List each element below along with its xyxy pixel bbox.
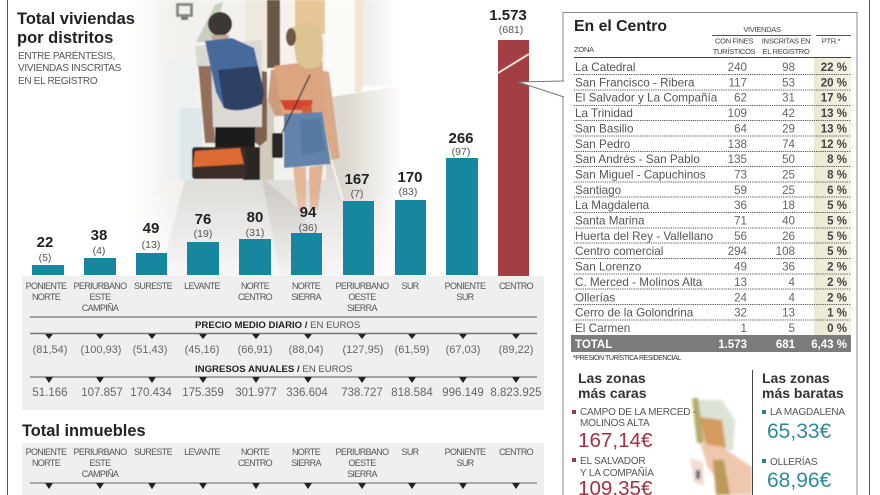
markers, second table <box>30 483 537 489</box>
table rows: San Francisco - Ribera <box>575 76 695 89</box>
district labels, second table: SIERRA <box>291 458 321 468</box>
table rows: 56 <box>734 230 747 243</box>
district labels: ESTE <box>90 292 111 302</box>
table rows: San Miguel - Capuchinos <box>575 168 706 182</box>
block: most expensive zones: Las zonas <box>578 370 646 386</box>
table rows: 13 % <box>821 123 847 135</box>
income row with markers: 107.857 <box>81 387 123 399</box>
income row with markers: 175.359 <box>182 387 224 399</box>
heading: Total inmuebles: Total inmuebles <box>22 422 146 440</box>
district labels: CAMPIÑA <box>82 303 119 313</box>
table rows: 294 <box>728 245 748 258</box>
price row with markers: (127,95) <box>343 344 383 356</box>
total row: 6,43 % <box>811 339 847 351</box>
table rows: 31 <box>782 92 795 105</box>
table rows: San Lorenzo <box>575 261 642 274</box>
bar chart: viviendas per district: (5) <box>39 252 51 264</box>
block: most expensive zones: 167,14€ <box>578 429 653 452</box>
table rows: 1 % <box>827 308 847 320</box>
table rows: Santiago <box>575 184 622 197</box>
row separators <box>574 74 851 320</box>
income row with markers: 8.823.925 <box>490 387 542 399</box>
table rows: 108 <box>776 245 795 258</box>
table rows: 98 <box>782 61 795 74</box>
price row with markers: (67,03) <box>446 344 480 356</box>
district labels, second table: PERIURBANO <box>335 447 389 457</box>
table rows: 4 <box>789 276 796 289</box>
block: most expensive zones: más caras <box>578 385 647 401</box>
block: most expensive zones: Y LA COMPAÑÍA <box>580 466 654 479</box>
price row with markers <box>30 334 537 356</box>
table rows: 2 % <box>827 277 847 289</box>
block: cheapest zones: 68,96€ <box>767 469 832 492</box>
district labels, second table: NORTE <box>32 458 61 468</box>
title: Total viviendas por distritos <box>17 10 135 47</box>
table rows: 25 <box>782 168 795 182</box>
bar chart: viviendas per district: 94 <box>300 204 317 221</box>
table header: ZONA <box>574 45 595 54</box>
table rows: 64 <box>734 122 748 135</box>
table rows: 109 <box>728 107 747 120</box>
district labels: LEVANTE <box>184 281 221 291</box>
table rows: El Salvador y La Compañía <box>575 92 718 105</box>
bar chart: viviendas per district: 170 <box>397 169 423 186</box>
district labels, second table: CENTRO <box>238 458 273 468</box>
price row with markers: (100,93) <box>81 344 121 356</box>
block: cheapest zones <box>762 370 845 492</box>
table rows: 49 <box>734 261 747 274</box>
table rows: 2 % <box>827 292 847 304</box>
heading: ingresos anuales: INGRESOS ANUALES / EN EUROS <box>195 364 352 375</box>
district labels, second table: ESTE <box>90 458 111 468</box>
table rows: 1 <box>741 322 747 335</box>
bar chart: viviendas per district: 80 <box>247 209 263 226</box>
table rows: 4 <box>789 291 796 304</box>
block: cheapest zones: más baratas <box>762 385 844 401</box>
district labels, second table: CAMPIÑA <box>82 469 119 479</box>
district labels: CENTRO <box>499 281 534 291</box>
district labels, second table: SUR <box>456 458 475 468</box>
district labels, second table <box>26 447 534 479</box>
income row with markers: 51.166 <box>32 387 68 399</box>
table rows: 25 <box>782 184 795 197</box>
table rows: 8 % <box>827 154 847 166</box>
PTR column shading <box>814 58 851 335</box>
income row with markers: 301.977 <box>235 387 277 399</box>
price row with markers: (51,43) <box>133 344 167 356</box>
block: cheapest zones: OLLERÍAS <box>770 455 818 468</box>
income row with markers: 818.584 <box>391 387 433 399</box>
income row with markers: 336.604 <box>286 387 328 399</box>
total row: TOTAL <box>575 339 612 351</box>
table rows: 32 <box>734 307 747 320</box>
subtitle note <box>18 49 122 87</box>
bar chart: viviendas per district: (97) <box>452 146 470 158</box>
table rows: Huerta del Rey - Vallellano <box>575 230 714 243</box>
price row with markers: (88,04) <box>289 344 323 356</box>
district labels: PERIURBANO <box>73 281 127 291</box>
bar chart: viviendas per district: 76 <box>195 211 211 228</box>
table rows: San Pedro <box>575 138 631 151</box>
district labels, second table: SURESTE <box>134 447 173 457</box>
table rows: 13 <box>734 276 747 289</box>
table rows: 5 % <box>827 216 847 228</box>
table rows: 71 <box>734 214 747 228</box>
block: most expensive zones: CAMPO DE LA MERCED - <box>580 407 696 418</box>
table rows: 240 <box>728 61 747 74</box>
block: most expensive zones: EL SALVADOR <box>580 456 645 467</box>
district labels, second table: OESTE <box>348 458 376 468</box>
lamp <box>176 3 193 20</box>
table rows: 36 <box>782 261 795 274</box>
table rows: 59 <box>734 184 747 197</box>
bar chart: viviendas per district: (7) <box>351 188 363 200</box>
price row with markers: (66,91) <box>238 344 272 356</box>
table rows: La Trinidad <box>575 107 633 120</box>
icon: hand holding banknotes <box>690 398 752 495</box>
table rows: 12 % <box>821 139 847 151</box>
table rows: 5 % <box>827 200 847 212</box>
table header: TURÍSTICOS <box>713 47 756 56</box>
district labels: PERIURBANO <box>335 281 389 291</box>
divider between cheap and expensive <box>752 370 754 495</box>
bar chart: viviendas per district: 49 <box>143 220 159 237</box>
bar chart: viviendas per district <box>32 7 529 276</box>
bar chart: viviendas per district: (19) <box>194 228 212 240</box>
block: cheapest zones: 65,33€ <box>767 420 832 443</box>
district labels: NORTE <box>292 281 321 291</box>
table header: EL REGISTRO <box>763 47 810 56</box>
district labels: PONIENTE <box>26 281 67 291</box>
table rows: 73 <box>734 168 747 182</box>
panel: En el Centro <box>518 12 857 495</box>
subtitle note: EN EL REGISTRO <box>18 76 98 87</box>
district labels: SIERRA <box>347 303 377 313</box>
bar chart: viviendas per district: 1.573 <box>489 7 527 24</box>
table header: PTR.* <box>822 36 841 46</box>
district labels, second table: NORTE <box>292 447 321 457</box>
table rows: Ollerías <box>575 291 615 304</box>
income row with markers: 170.434 <box>130 387 172 399</box>
table rows: 29 <box>782 122 795 135</box>
table rows <box>575 61 847 335</box>
district labels, second table: CENTRO <box>499 447 534 457</box>
district labels, second table: SIERRA <box>347 469 377 479</box>
suitcase <box>192 147 246 179</box>
table rows: 18 <box>782 199 795 212</box>
district labels: SUR <box>401 281 420 291</box>
callout pointer from Centro bar to panel <box>518 81 564 97</box>
woman <box>268 23 343 210</box>
bar chart: viviendas per district: 38 <box>91 227 107 244</box>
table header: INSCRITAS EN <box>762 36 810 46</box>
table rows: San Basilio <box>575 122 634 135</box>
district labels: NORTE <box>241 281 270 291</box>
table rows: 53 <box>782 76 795 89</box>
district labels, second table: LEVANTE <box>184 447 221 457</box>
block: most expensive zones <box>572 370 696 495</box>
table rows: 117 <box>729 76 747 89</box>
table header <box>574 25 851 58</box>
table rows: 13 <box>782 307 795 320</box>
bar chart: viviendas per district: (4) <box>93 245 105 257</box>
block: cheapest zones: LA MAGDALENA <box>770 407 845 418</box>
bar chart: viviendas per district: (13) <box>142 239 160 251</box>
bar: Centro <box>498 40 529 276</box>
table rows: El Carmen <box>575 322 630 335</box>
price row with markers: (61,59) <box>395 344 429 356</box>
table rows: 24 <box>734 291 748 304</box>
title: Total viviendas por distritos: por distritos <box>17 29 113 47</box>
district labels: OESTE <box>348 292 376 302</box>
price row with markers: (45,16) <box>185 344 219 356</box>
income row with markers: 738.727 <box>341 387 383 399</box>
table rows: 74 <box>782 138 796 151</box>
bar chart: viviendas per district: 167 <box>344 171 370 188</box>
district labels <box>26 281 534 313</box>
block: cheapest zones: Las zonas <box>762 370 830 386</box>
district labels, second table: PONIENTE <box>26 447 67 457</box>
bar chart: viviendas per district: (36) <box>299 222 317 234</box>
district labels, second table: PERIURBANO <box>73 447 127 457</box>
district labels, second table: NORTE <box>241 447 270 457</box>
table rows: 5 % <box>827 231 847 243</box>
table rows: Cerro de la Golondrina <box>575 307 694 320</box>
total row <box>571 335 851 352</box>
table rows: 36 <box>734 199 747 212</box>
district labels: SURESTE <box>134 281 173 291</box>
table rows: 20 % <box>821 77 847 89</box>
total row: 1.573 <box>718 339 747 351</box>
table rows: 135 <box>728 153 747 166</box>
table rows: La Catedral <box>575 61 635 74</box>
table rows: 22 % <box>821 62 847 74</box>
table rows: 62 <box>734 92 747 105</box>
panel heading: En el Centro <box>574 18 667 35</box>
table rows: 5 <box>789 322 795 335</box>
table header: VIVIENDAS <box>743 25 781 34</box>
bar chart: viviendas per district: 22 <box>37 234 53 251</box>
table rows: 5 % <box>827 246 847 258</box>
bar chart: viviendas per district: (83) <box>399 186 417 198</box>
subtitle note: ENTRE PARÉNTESIS, <box>18 49 115 62</box>
table rows: San Andrés - San Pablo <box>575 153 700 166</box>
income row with markers: 996.149 <box>442 387 484 399</box>
photo: tourists with luggage in a narrow street <box>128 0 405 277</box>
table rows: Centro comercial <box>575 245 663 258</box>
panel: district data strip <box>22 276 544 410</box>
income row with markers <box>30 377 542 399</box>
table rows: 17 % <box>821 93 847 105</box>
district labels: NORTE <box>32 292 61 302</box>
table rows: 2 % <box>827 262 847 274</box>
heading: precio medio diario: PRECIO MEDIO DIARIO / EN EUROS <box>195 320 360 331</box>
price row with markers: (89,22) <box>499 344 533 356</box>
table rows: C. Merced - Molinos Alta <box>575 276 703 289</box>
man <box>195 12 267 180</box>
district labels, second table: PONIENTE <box>445 447 486 457</box>
table rows: La Magdalena <box>575 199 650 212</box>
table rows: 138 <box>728 138 747 151</box>
district labels: SIERRA <box>291 292 321 302</box>
title: Total viviendas por distritos: Total viviendas <box>17 10 135 28</box>
table rows: 8 % <box>827 170 847 182</box>
table rows: 13 % <box>821 108 847 120</box>
table header: CON FINES <box>715 36 753 46</box>
bar chart: viviendas per district: 266 <box>448 130 474 147</box>
panel: total inmuebles strip <box>22 443 544 495</box>
footnote: *PRESIÓN TURÍSTICA RESIDENCIAL <box>573 353 681 362</box>
table rows: 6 % <box>827 185 847 197</box>
district labels: PONIENTE <box>445 281 486 291</box>
table rows: Santa Marina <box>575 214 645 228</box>
subtitle note: VIVIENDAS INSCRITAS <box>18 63 122 74</box>
district labels: SUR <box>456 292 475 302</box>
price row with markers: (81,54) <box>33 344 67 356</box>
district labels: CENTRO <box>238 292 273 302</box>
block: most expensive zones: MOLINOS ALTA <box>580 418 650 429</box>
table rows: 0 % <box>827 323 847 335</box>
table rows: 26 <box>782 230 795 243</box>
table rows: 42 <box>782 107 795 120</box>
bar chart: viviendas per district: (31) <box>246 227 264 239</box>
bar chart: viviendas per district: (681) <box>499 24 523 36</box>
district labels, second table: SUR <box>401 447 420 457</box>
table rows: 50 <box>782 153 795 166</box>
total row: 681 <box>776 339 796 351</box>
table rows: 40 <box>782 214 795 228</box>
